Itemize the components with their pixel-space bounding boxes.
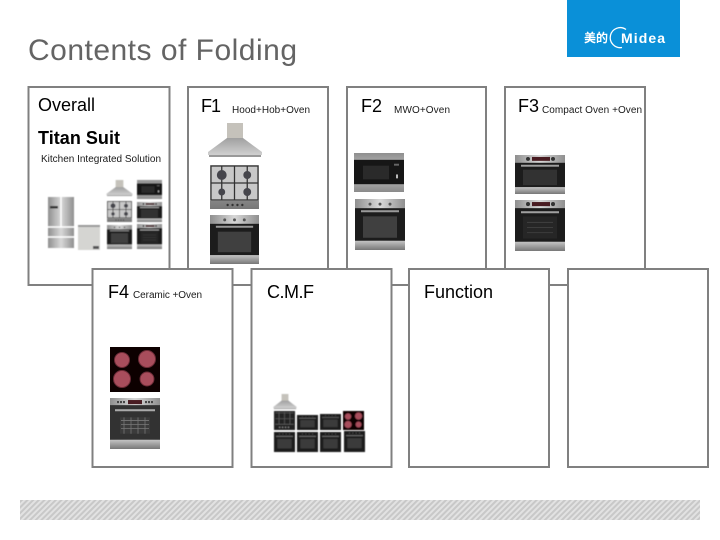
caption: Compact Oven+Oven: Compact Oven +Oven [542,105,642,116]
icon: fridge [48,197,74,248]
icon: compact oven [515,155,565,194]
logo: Midea: 美的 [584,30,608,45]
panel: F4 [92,269,232,467]
image: colour variants [273,394,365,452]
icon: hood [273,394,297,409]
icon: black compact oven [320,414,341,430]
heading: Function: Function [424,282,493,302]
icon: black microwave [297,415,318,430]
panel: Function [409,269,549,467]
caption: Ceramic+Oven: Ceramic +Oven [133,290,202,301]
caption: Hood+Hob+Oven: Hood+Hob+Oven [232,105,310,116]
icon: small oven B [137,224,162,249]
heading: F2: F2 [361,96,382,116]
subheading: Kitchen Integrated Solution: Kitchen Integrated Solution [41,154,161,165]
icon: black oven 1 [274,432,295,452]
panel: F3 [505,87,645,285]
icon: small oven [107,225,132,249]
icon: ceramic hob [343,411,364,430]
icon: small hob [107,201,132,222]
heading: F4: F4 [108,282,129,302]
logo: Midea [567,0,680,57]
panel: Overall [28,87,170,285]
panel: F2 [347,87,486,285]
icon: microwave [354,153,404,192]
image: full appliance suite [48,180,162,250]
icon: hood [208,123,262,157]
logo: Midea: Midea [621,30,665,46]
caption: MWO+Oven: MWO+Oven [394,105,450,116]
icon: small compact oven [137,202,162,222]
heading: Overall: Overall [38,95,95,115]
heading: F3: F3 [518,96,539,116]
icon: small hood [106,180,133,196]
heading: F1: F1 [201,96,221,116]
icon: small microwave [137,180,162,199]
panel: blank [568,269,708,467]
icon: black oven 4 [344,431,365,452]
icon: gas hob [210,165,259,209]
icon: oven [515,200,565,251]
panel: C.M.F [252,269,392,467]
icon: oven [110,398,160,449]
icon: ceramic hob [110,347,160,392]
footer band [20,500,700,520]
icon: black oven 2 [297,432,318,452]
icon: oven [355,199,405,250]
icon: oven [210,215,259,264]
heading: C.M.F: C.M.F [267,282,314,302]
icon: dishwasher [78,225,100,250]
title: Contents of Folding [28,34,297,67]
icon: black hob [274,411,295,430]
heading: Titan Suit: Titan Suit [38,128,120,148]
panel: F1 [188,87,328,285]
icon: black oven 3 [320,432,341,452]
